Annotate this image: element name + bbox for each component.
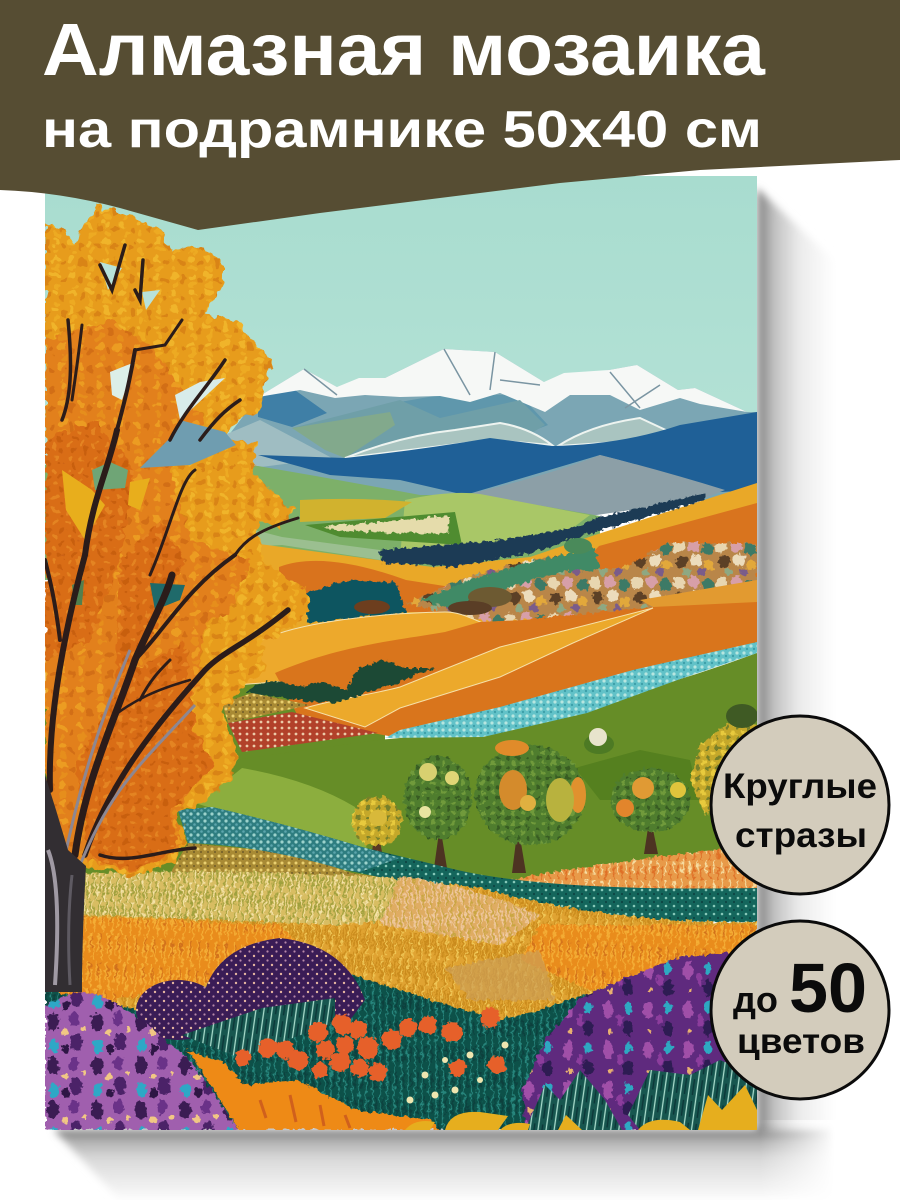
tree one [352, 796, 402, 852]
gold flower patch by tree [172, 843, 381, 878]
dark bush [726, 704, 758, 728]
peach field right [510, 848, 757, 888]
dark bushes [245, 660, 435, 703]
badge: up to 50 colours: цветов [737, 1022, 865, 1061]
badge: up to 50 colours: 50 [789, 949, 867, 1027]
badge: up to 50 colours: до [733, 979, 778, 1020]
lilac bush left [45, 992, 238, 1130]
branches [45, 245, 298, 858]
tree four [610, 768, 690, 854]
green lighter slope [198, 768, 366, 848]
green foreground field [385, 653, 757, 880]
teal grass base [45, 974, 639, 1130]
trunk [45, 775, 86, 992]
tree three [475, 740, 586, 873]
dark purple flower bushes [136, 938, 365, 1058]
small trees [352, 704, 758, 873]
badge: round rhinestones: стразы [735, 816, 867, 855]
orange field right [260, 483, 757, 632]
pale flowers [406, 1042, 508, 1104]
foliage [45, 205, 312, 877]
orange bush red flecks [260, 1095, 350, 1128]
badge: up to 50 colours [711, 921, 889, 1099]
teal spiky leaves right [525, 1060, 757, 1130]
blue mountain band [258, 412, 757, 495]
small white bush [584, 728, 614, 754]
title: Алмазная мозаика [42, 8, 766, 91]
orange poppies [235, 1008, 506, 1081]
gaps in foliage [62, 262, 236, 610]
painting: autumn landscape canvas [45, 176, 758, 1130]
badge: round rhinestones: Круглые [723, 767, 877, 806]
canvas shadow [54, 188, 850, 1200]
rolling orange hills [45, 602, 757, 738]
subtitle: на подрамнике 50х40 см [42, 101, 762, 159]
header banner [0, 0, 900, 230]
green shade patch [575, 750, 700, 800]
teal flower ribbon [178, 807, 757, 922]
badge: round rhinestones [711, 716, 889, 894]
flower meadow patch [406, 538, 757, 623]
pale limbs [62, 650, 195, 870]
snowy mountains [222, 349, 757, 500]
purple bush right [520, 952, 729, 1130]
brown bush in forest [354, 600, 390, 614]
dark tree line [380, 493, 705, 567]
golden grass field [45, 871, 757, 1030]
green hills [45, 465, 600, 580]
tree two [404, 756, 472, 868]
green ground behind hills [45, 682, 385, 875]
yellow leaves [405, 1085, 757, 1130]
orange bush [187, 1050, 440, 1130]
gold and red flower patches [222, 693, 378, 752]
teal forest [306, 580, 406, 623]
sky [45, 176, 757, 496]
yellow bush [690, 722, 757, 815]
autumn tree [45, 205, 312, 992]
grey hill [465, 455, 725, 516]
teal flower strip [385, 642, 757, 738]
